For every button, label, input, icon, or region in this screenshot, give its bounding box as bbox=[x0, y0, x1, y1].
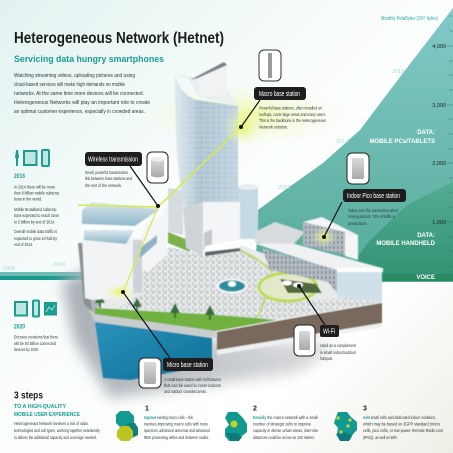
slim building bbox=[168, 188, 183, 235]
foundation edge bbox=[217, 323, 382, 355]
green glow bbox=[140, 83, 350, 147]
2020 text bbox=[14, 334, 58, 352]
step 3 text bbox=[363, 406, 444, 440]
step 1 text: 1 bbox=[145, 406, 149, 412]
left building bbox=[78, 202, 167, 312]
callout: macro base station bbox=[239, 50, 326, 130]
axis labels: 3,000 bbox=[432, 103, 446, 109]
axis labels bbox=[432, 44, 446, 226]
callout: indoor pico base station: Takes over the connection when bbox=[348, 208, 398, 213]
year labels: 2014 bbox=[336, 139, 348, 145]
chart series labels: VOICE bbox=[416, 275, 435, 281]
signal glow: macro bbox=[223, 107, 263, 147]
callout: macro base station: Network solution. bbox=[259, 124, 288, 130]
callout: micro base station: and outdoor crowded areas. bbox=[164, 389, 207, 394]
axis labels: 1,000 bbox=[432, 220, 446, 226]
callout: wi-fi: Wi-Fi bbox=[323, 328, 335, 336]
plaza green path bbox=[233, 248, 273, 317]
year labels: 2008 bbox=[3, 266, 15, 272]
fountain bbox=[216, 278, 248, 294]
3 steps subtitle: MOBILE USER EXPERIENCE bbox=[14, 412, 80, 418]
grass bbox=[95, 308, 277, 331]
callout: micro base station bbox=[121, 290, 222, 394]
callout: macro base station: rooftops, cover large areas and many users. bbox=[259, 112, 326, 117]
chart layer: voice bbox=[380, 274, 453, 281]
2020 text: devices by 2020. bbox=[14, 347, 39, 352]
2016 icons bbox=[15, 150, 49, 166]
intro text: Watching streaming videos, uploading pictures and using bbox=[14, 73, 135, 79]
step 1 text: spectrum, advanced antennas and advanced bbox=[144, 428, 210, 433]
callout: indoor pico base station: moving indoors. 70% of traffic is bbox=[348, 214, 395, 219]
water bbox=[95, 322, 212, 380]
intro text: cloud-based services will make high demands on mobile bbox=[14, 82, 125, 88]
3 steps subtitle bbox=[14, 404, 80, 418]
chart: monthly data traffic area bbox=[255, 8, 453, 282]
chart series labels: DATA: bbox=[417, 233, 435, 239]
step 1 text bbox=[144, 406, 210, 440]
signal glow: pico bbox=[311, 227, 337, 247]
crowd bbox=[118, 247, 382, 319]
callout: wireless transmission bbox=[85, 152, 168, 208]
step 1 text: RBS processing within and between nodes. bbox=[144, 435, 209, 440]
green bush bbox=[168, 232, 190, 252]
2020 text: Ericsson envisions that there bbox=[14, 334, 58, 340]
callout: micro base station: that can be used to cover indoors bbox=[164, 383, 222, 388]
callout: indoor pico base station bbox=[322, 153, 406, 239]
subtitle: Servicing data hungry smartphones bbox=[14, 54, 164, 65]
2016 text: Overall mobile data traffic is bbox=[14, 229, 57, 234]
embankment bbox=[84, 300, 216, 338]
step 3 text: (RRU)), as well as WiFi. bbox=[363, 435, 398, 440]
callout: wireless transmission: Small, powerful transmission bbox=[85, 170, 128, 175]
tower podium bbox=[183, 202, 240, 256]
3 steps intro text: to deliver the additional capacity and coverage needed. bbox=[14, 435, 97, 440]
title: Heterogeneous Network (Hetnet) bbox=[14, 30, 224, 47]
trees bbox=[95, 293, 215, 320]
year labels bbox=[3, 69, 404, 272]
cafe tables bbox=[280, 279, 322, 293]
3 steps intro text bbox=[14, 421, 100, 440]
step 2 text: number of strategic cells to improve bbox=[253, 422, 311, 426]
axis labels: 2,000 bbox=[432, 161, 446, 167]
callout: macro base station: Powerful base stations, often installed on bbox=[259, 106, 322, 110]
callout: wi-fi: in small indoor/outdoor bbox=[320, 350, 356, 355]
step 3 icon bbox=[334, 412, 357, 441]
callout: wireless transmission: the rest of the network. bbox=[85, 183, 122, 188]
step 1 text: involves improving macro cells with more bbox=[144, 422, 208, 426]
step 2 icon bbox=[225, 412, 247, 441]
wi-fi green ring bbox=[259, 273, 317, 301]
callout: wi-fi: Used as a complement bbox=[320, 343, 357, 348]
building shadow bbox=[62, 250, 340, 398]
step 2 text: Densify the macro network with a small bbox=[253, 415, 318, 420]
chart history stripes bbox=[0, 272, 84, 280]
lower tower bbox=[238, 184, 258, 239]
chart series labels: MOBILE HANDHELD bbox=[376, 241, 436, 247]
step 1 text: Improve existing macro cells – this bbox=[144, 415, 193, 420]
rear right building bbox=[255, 217, 358, 260]
plaza base bbox=[95, 245, 382, 331]
3 steps intro text: Heterogeneous Network involves a mix of radio bbox=[14, 421, 88, 426]
3 steps heading: 3 steps bbox=[14, 390, 43, 402]
callout: wireless transmission: Wireless transmission bbox=[88, 156, 138, 164]
chart series labels bbox=[369, 130, 436, 281]
chart axis bbox=[447, 16, 453, 266]
signal glow: micro bbox=[102, 283, 138, 301]
3 steps subtitle: TO A HIGH-QUALITY bbox=[14, 404, 66, 410]
year labels: 2009 bbox=[53, 262, 65, 268]
front right building bbox=[253, 243, 383, 302]
2020 icons bbox=[15, 300, 57, 316]
tower bbox=[175, 62, 238, 206]
callout: indoor pico base station: Indoor Pico base station bbox=[347, 193, 400, 200]
callout: macro base station: This is the backbone in the Heterogeneous bbox=[259, 118, 326, 123]
chart layer: mobile handheld bbox=[340, 182, 453, 281]
2016 text: Mobile Broadband subscrip- bbox=[14, 207, 57, 212]
chart series labels: DATA: bbox=[417, 130, 435, 136]
illustrated city block bbox=[78, 62, 383, 380]
callout: wi-fi: hotspots. bbox=[320, 356, 333, 361]
year labels: 2013 bbox=[278, 185, 290, 191]
step 1 icon bbox=[116, 411, 138, 441]
intro text bbox=[14, 73, 150, 115]
chart series labels: MOBILE PCs/TABLETS bbox=[369, 139, 435, 145]
step 2 text bbox=[253, 406, 318, 440]
axis labels: 4,000 bbox=[432, 44, 446, 50]
2020 text: will be 50 billion connected bbox=[14, 341, 56, 346]
2016 text: tions in the world. bbox=[14, 196, 42, 202]
step 2 text: 2 bbox=[253, 406, 257, 412]
step 2 text: distances could be as low as 100 meters. bbox=[253, 435, 315, 440]
signal rays bbox=[78, 127, 241, 292]
2016 text: end of 2014. bbox=[14, 242, 33, 247]
2016 text: tions expected to reach close bbox=[14, 213, 59, 218]
2020 heading: 2020 bbox=[14, 324, 25, 330]
step 3 text: 3 bbox=[363, 406, 367, 412]
callout: micro base station: Micro base station bbox=[167, 362, 208, 369]
2016 text: expected to grow 10-fold by bbox=[14, 236, 57, 241]
callout: macro base station: Macro base station bbox=[259, 91, 300, 98]
2016 text: to 5 billion by end of 2014. bbox=[14, 220, 55, 224]
intro text: Heterogeneous Networks will play an important role to create bbox=[14, 100, 150, 106]
2016 heading: 2016 bbox=[14, 173, 25, 180]
callout: wireless transmission: link between base stations and bbox=[85, 176, 132, 181]
callout: micro base station: A small base station with full features bbox=[164, 377, 221, 382]
step 2 text: capacity in dense urban areas, inter-site bbox=[253, 428, 318, 433]
intro text: an optimal customer experience, especially in crowded areas. bbox=[14, 109, 145, 115]
2016 text bbox=[14, 184, 60, 247]
3 steps intro text: technologies and cell types, working together seamlessly bbox=[14, 428, 100, 433]
2016 text: In 2014 there will be more bbox=[14, 184, 55, 190]
callout: wi-fi bbox=[294, 284, 357, 361]
intro text: networks. At the same time more devices will be connected. bbox=[14, 91, 144, 97]
year labels: 2015 bbox=[392, 69, 404, 75]
soil section bbox=[217, 302, 382, 350]
callout: indoor pico base station: generated indoors. bbox=[348, 221, 367, 226]
2016 text: than 8 billion mobile subscrip- bbox=[14, 190, 60, 196]
